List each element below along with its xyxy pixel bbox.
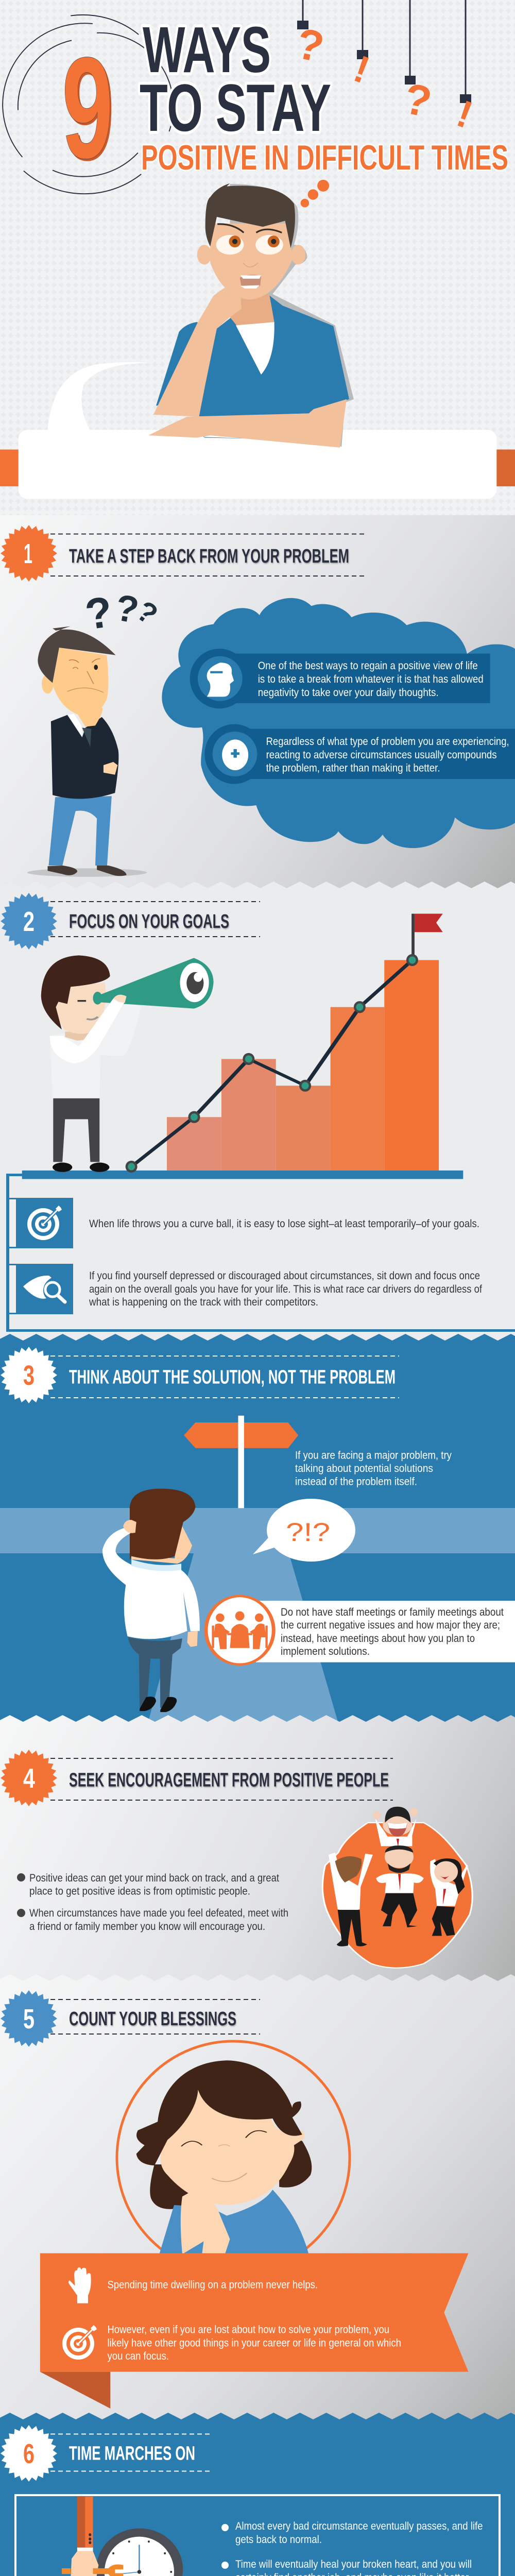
big number 9: 9 xyxy=(63,30,115,191)
bullet list: Positive ideas can get your mind back on track, and a great xyxy=(29,1872,279,1884)
speech bubble: ?!? xyxy=(286,1518,330,1547)
hanging question and exclamation marks: ! xyxy=(349,47,375,92)
number badge 3 xyxy=(1,1347,57,1403)
number badge 2 xyxy=(1,893,57,950)
title: TO STAY xyxy=(140,70,331,145)
hanging question and exclamation marks xyxy=(292,0,478,137)
text block: reacting compounds problem: the problem, rather than making it better. xyxy=(266,762,440,774)
question marks: ? xyxy=(82,587,115,639)
number badge 6: 6 xyxy=(23,2438,35,2469)
icon: meeting xyxy=(206,1596,273,1665)
question marks xyxy=(82,587,164,639)
icon: target xyxy=(9,1198,73,1248)
number badge 5: 5 xyxy=(23,2004,35,2035)
question marks: ? xyxy=(112,587,142,632)
illustration: smiling woman xyxy=(136,2060,312,2254)
heading 5 xyxy=(50,1999,260,2034)
bullet list xyxy=(221,2520,483,2576)
bullet list: place to get positive ideas is from optimistic people. xyxy=(29,1886,250,1897)
bullet list xyxy=(17,1872,288,1933)
illustration: man with telescope xyxy=(41,955,214,1172)
callout: meetings about solutions: implement solutions. xyxy=(281,1646,370,1657)
white frame xyxy=(15,2495,500,2576)
text: talk about solutions: instead of the problem itself. xyxy=(295,1476,417,1488)
ribbon banner: likely have other good things in your career or life in general on which xyxy=(107,2337,401,2349)
icon: eye with magnifier xyxy=(9,1264,73,1314)
ribbon banner xyxy=(40,2253,469,2409)
question marks: ? xyxy=(131,594,164,631)
panel: section 6 time marches on xyxy=(0,2413,515,2576)
text block: take a break: is to take a break from whatever it is that has allowed xyxy=(258,673,484,685)
illustration: thinking man xyxy=(148,180,354,448)
panel: section 2 focus on your goals xyxy=(0,882,515,1345)
text: talk about solutions: talking about potential solutions xyxy=(295,1463,433,1475)
panel: section 1 take a step back xyxy=(0,515,515,891)
heading 2 xyxy=(50,902,260,937)
text block: take a break xyxy=(258,660,484,699)
light band and beam xyxy=(0,1508,515,1723)
illustration: clock with wrench xyxy=(39,2497,199,2576)
number badge 1: 1 xyxy=(24,538,32,569)
illustration: confused man xyxy=(27,626,147,877)
ribbon and white card xyxy=(0,362,515,499)
callout: meetings about solutions: instead, have meetings about how you plan to xyxy=(281,1633,475,1645)
text block: take a break: negativity to take over your daily thoughts. xyxy=(258,687,439,699)
bullet list: Time will eventually heal your broken heart, and you will xyxy=(235,2558,472,2570)
text: talk about solutions xyxy=(295,1450,452,1488)
bullet list: gets back to normal. xyxy=(235,2534,322,2546)
text: talk about solutions: If you are facing a major problem, try xyxy=(295,1450,452,1461)
bullet list: Almost every bad circumstance eventually passes, and life xyxy=(235,2520,483,2532)
cloud panel xyxy=(162,598,515,848)
number badge 4: 4 xyxy=(23,1763,35,1794)
hanging question and exclamation marks: ? xyxy=(400,74,436,127)
hanging question and exclamation marks: ? xyxy=(292,19,328,72)
big number 9: 9 xyxy=(62,28,113,189)
heading 4 xyxy=(50,1758,393,1800)
heading 1 xyxy=(50,534,365,576)
title: WAYS xyxy=(143,13,271,86)
text: refocus on goals xyxy=(89,1270,482,1308)
text: lose sight of goals: When life throws you a curve ball, it is easy to lose sight–at least temporarily–of your goals. xyxy=(89,1218,479,1230)
heading 6: TIME MARCHES ON xyxy=(69,2443,195,2465)
panel: hero xyxy=(0,0,515,520)
illustration: man from behind xyxy=(102,1488,200,1712)
callout: meetings about solutions xyxy=(206,1596,515,1665)
big number 9 xyxy=(62,28,115,191)
text: refocus on goals: what is happening on the track with their competitors. xyxy=(89,1296,318,1308)
decorative concentric arcs xyxy=(3,15,174,194)
title xyxy=(140,13,508,177)
icon: hand xyxy=(68,2267,91,2303)
bullet list: When circumstances have made you feel defeated, meet with xyxy=(29,1907,288,1919)
number badge 1 xyxy=(1,525,57,582)
bullet list: a friend or family member you know will encourage you. xyxy=(29,1921,265,1933)
heading 1: TAKE A STEP BACK FROM YOUR PROBLEM xyxy=(69,546,349,567)
bar chart with rising line and flag xyxy=(22,914,463,1179)
panel: section 5 count your blessings xyxy=(0,1974,515,2421)
number badge 6 xyxy=(1,2425,57,2482)
panel: section 4 seek encouragement xyxy=(0,1715,515,1984)
number badge 4 xyxy=(1,1750,57,1806)
speech bubble xyxy=(253,1499,355,1562)
number badge 3: 3 xyxy=(23,1360,35,1391)
number badge 5 xyxy=(1,1990,57,2047)
illustration: cheering people xyxy=(322,1807,472,1968)
ribbon banner: Spending time dwelling on a problem never helps. xyxy=(107,2279,318,2291)
orange ring xyxy=(117,2041,350,2274)
hanging question and exclamation marks: ! xyxy=(452,92,478,137)
heading 3 xyxy=(50,1356,399,1398)
text block: reacting compounds problem xyxy=(266,736,509,774)
ribbon banner: you can focus. xyxy=(107,2350,169,2362)
goal list frame xyxy=(6,1174,515,1332)
number badge 2: 2 xyxy=(23,906,35,937)
icon: target xyxy=(62,2325,97,2360)
panel: section 3 think about the solution xyxy=(0,1334,515,1726)
heading 5: COUNT YOUR BLESSINGS xyxy=(69,2008,236,2030)
ribbon banner: However, even if you are lost about how to solve your problem, you xyxy=(107,2324,389,2336)
signpost xyxy=(184,1416,298,1508)
heading 6 xyxy=(50,2434,210,2471)
heading 2: FOCUS ON YOUR GOALS xyxy=(69,911,229,933)
text block: take a break: One of the best ways to regain a positive view of life xyxy=(258,660,478,672)
